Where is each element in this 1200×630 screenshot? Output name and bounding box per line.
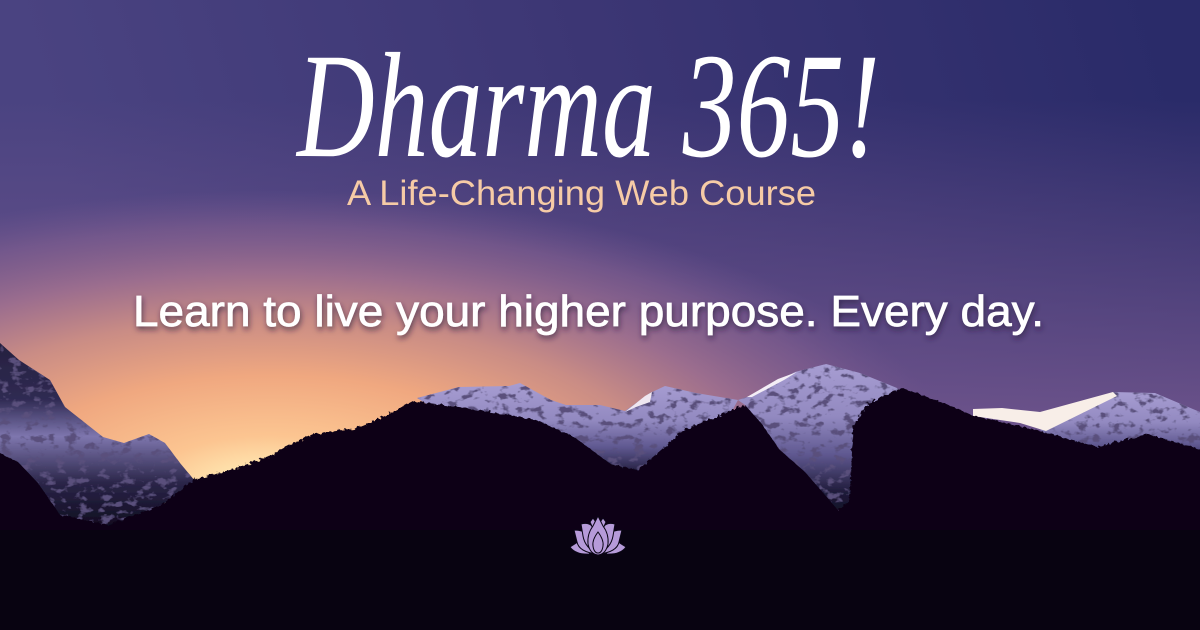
sunlit ridge highlight on central peak	[747, 372, 797, 397]
subtitle: A Life-Changing Web Course	[347, 174, 816, 213]
dark forested foreground	[0, 388, 1200, 630]
sunlit ridge highlight on left peak	[625, 392, 652, 412]
mountains	[0, 343, 1200, 630]
deep foreground shade	[0, 530, 1200, 630]
icon: lotus	[570, 516, 626, 555]
centre-left snowy ridge	[417, 383, 738, 490]
left snowy mountain	[0, 343, 195, 530]
title: Dharma 365!	[296, 23, 880, 189]
central snowy peak	[738, 364, 906, 515]
right sunlit slope	[973, 392, 1117, 431]
right snowy peak	[1040, 392, 1200, 480]
tagline: Learn to live your higher purpose. Every day.	[133, 287, 1044, 336]
